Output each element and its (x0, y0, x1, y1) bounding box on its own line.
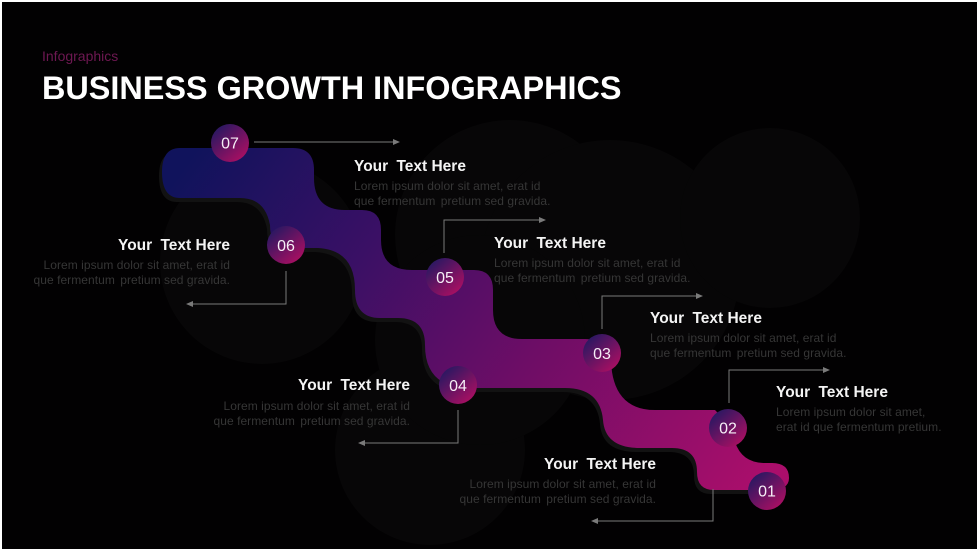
text block 02 (776, 384, 942, 434)
text block 04 (214, 377, 410, 428)
text block 01: que fermentum pretium sed gravida. (460, 492, 656, 506)
text block 01 (460, 456, 656, 506)
arrow 03 (602, 296, 702, 329)
marker 07: 07 (221, 136, 239, 152)
text block 03: que fermentum pretium sed gravida. (650, 346, 846, 360)
text block 07: que fermentum pretium sed gravida. (354, 194, 550, 208)
arrow 04 (359, 410, 458, 443)
marker 05: 05 (436, 270, 454, 287)
marker 04 (439, 366, 477, 404)
text block 02: Lorem ipsum dolor sit amet, (776, 405, 925, 419)
text block 01: Your Text Here (544, 456, 656, 473)
text block 06: Lorem ipsum dolor sit amet, erat id (44, 258, 230, 272)
text block 03: Lorem ipsum dolor sit amet, erat id (650, 331, 836, 345)
text block 03 (650, 310, 846, 360)
arrow 07 (254, 141, 399, 143)
marker 03: 03 (593, 346, 611, 363)
text block 06: que fermentum pretium sed gravida. (34, 272, 230, 286)
title: BUSINESS GROWTH INFOGRAPHICS (42, 70, 621, 106)
marker 04: 04 (449, 378, 467, 395)
text block 05: Lorem ipsum dolor sit amet, erat id (494, 256, 680, 270)
marker 07 (211, 124, 249, 162)
marker 06: 06 (277, 238, 295, 255)
marker 01 (748, 472, 786, 510)
text block 07 (354, 158, 550, 208)
text block 07: Lorem ipsum dolor sit amet, erat id (354, 179, 540, 193)
text block 07: Your Text Here (354, 158, 466, 175)
ribbon shadow (159, 152, 786, 494)
background blobs (160, 120, 860, 545)
marker 01: 01 (758, 484, 776, 500)
text block 04: que fermentum pretium sed gravida. (214, 414, 410, 428)
arrow 05 (444, 220, 545, 253)
arrow 02 (729, 370, 829, 403)
text block 02: Your Text Here (776, 384, 888, 401)
text block 05 (494, 235, 690, 284)
text block 01: Lorem ipsum dolor sit amet, erat id (470, 477, 656, 491)
arrow 06 (187, 271, 286, 304)
marker 02 (709, 409, 747, 447)
text block 05: Your Text Here (494, 235, 606, 252)
text block 05: que fermentum pretium sed gravida. (494, 270, 690, 284)
text block 03: Your Text Here (650, 310, 762, 327)
marker 06 (267, 226, 305, 264)
eyebrow label: Infographics (42, 48, 118, 64)
text block 04: Your Text Here (298, 377, 410, 394)
text block 04: Lorem ipsum dolor sit amet, erat id (224, 399, 410, 413)
text block 06 (34, 237, 230, 286)
marker 03 (583, 334, 621, 372)
marker 05 (426, 258, 464, 296)
text block 02: erat id que fermentum pretium. (776, 420, 942, 434)
arrow 01 (592, 489, 713, 521)
text block 06: Your Text Here (118, 237, 230, 254)
marker 02: 02 (719, 420, 737, 438)
ribbon (162, 148, 789, 490)
